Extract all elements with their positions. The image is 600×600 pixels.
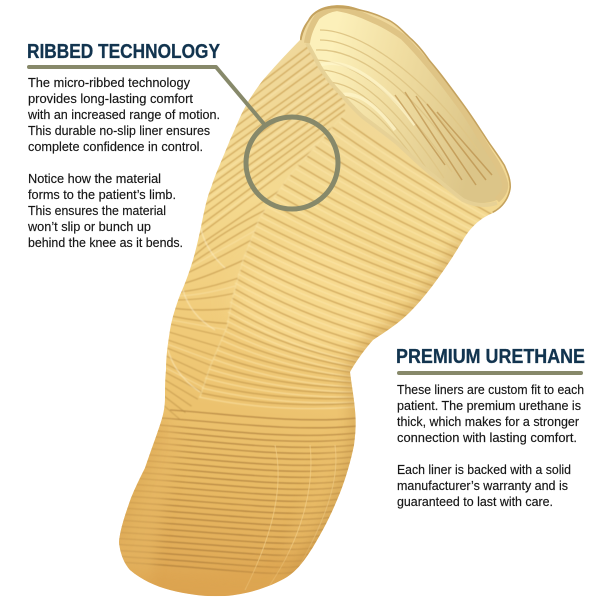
text block: ribbed technology: behind the knee as it bends. xyxy=(28,236,183,250)
text block: ribbed technology: provides long-lasting comfort xyxy=(28,92,194,106)
text block: premium urethane xyxy=(397,383,584,509)
inner opening xyxy=(310,11,502,203)
text block: premium urethane: Each liner is backed with a solid xyxy=(397,463,571,477)
text block: premium urethane: guaranteed to last with care. xyxy=(397,495,553,509)
text block: premium urethane: These liners are custom fit to each xyxy=(397,383,584,397)
text block: ribbed technology: Notice how the material xyxy=(28,172,161,186)
text block: ribbed technology: complete confidence in control. xyxy=(28,140,203,154)
curved seam lines lower xyxy=(245,445,336,590)
callout pointer and circle: ribbed technology xyxy=(29,67,338,209)
liner product illustration xyxy=(119,5,511,596)
ribs: left panel xyxy=(162,34,345,428)
text block: ribbed technology: This ensures the material xyxy=(28,204,166,218)
low contrast strip: lower left xyxy=(119,416,178,583)
ribs: right of seam xyxy=(201,118,505,405)
text block: premium urethane: manufacturer’s warranty and is xyxy=(397,479,568,493)
edge shading xyxy=(120,433,158,532)
text block: ribbed technology: This durable no-slip liner ensures xyxy=(28,124,210,138)
rim band xyxy=(307,43,497,205)
ribs: fine lower rows xyxy=(110,410,358,573)
text block: premium urethane: connection with lasting comfort. xyxy=(397,431,577,445)
rim outer edge xyxy=(300,7,511,213)
white edge glints xyxy=(168,225,225,392)
text block: ribbed technology: The micro-ribbed technology xyxy=(28,76,191,90)
text block: ribbed technology xyxy=(27,76,220,250)
text block: ribbed technology: forms to the patient’s limb. xyxy=(28,188,176,202)
text block: ribbed technology: won’t slip or bunch up xyxy=(27,220,151,234)
text block: premium urethane: thick, which makes for a stronger xyxy=(397,415,579,429)
text block: premium urethane: patient. The premium urethane is xyxy=(397,399,581,413)
low contrast strip: lower right xyxy=(291,446,344,550)
seam xyxy=(200,113,345,397)
divider bar: premium urethane xyxy=(397,371,583,375)
rib highlights xyxy=(199,122,503,409)
toe shading xyxy=(130,545,314,596)
lighter centre glow xyxy=(238,256,380,356)
text block: ribbed technology: with an increased range of motion. xyxy=(27,108,220,122)
heading: ribbed technology: RIBBED TECHNOLOGY xyxy=(27,41,221,63)
